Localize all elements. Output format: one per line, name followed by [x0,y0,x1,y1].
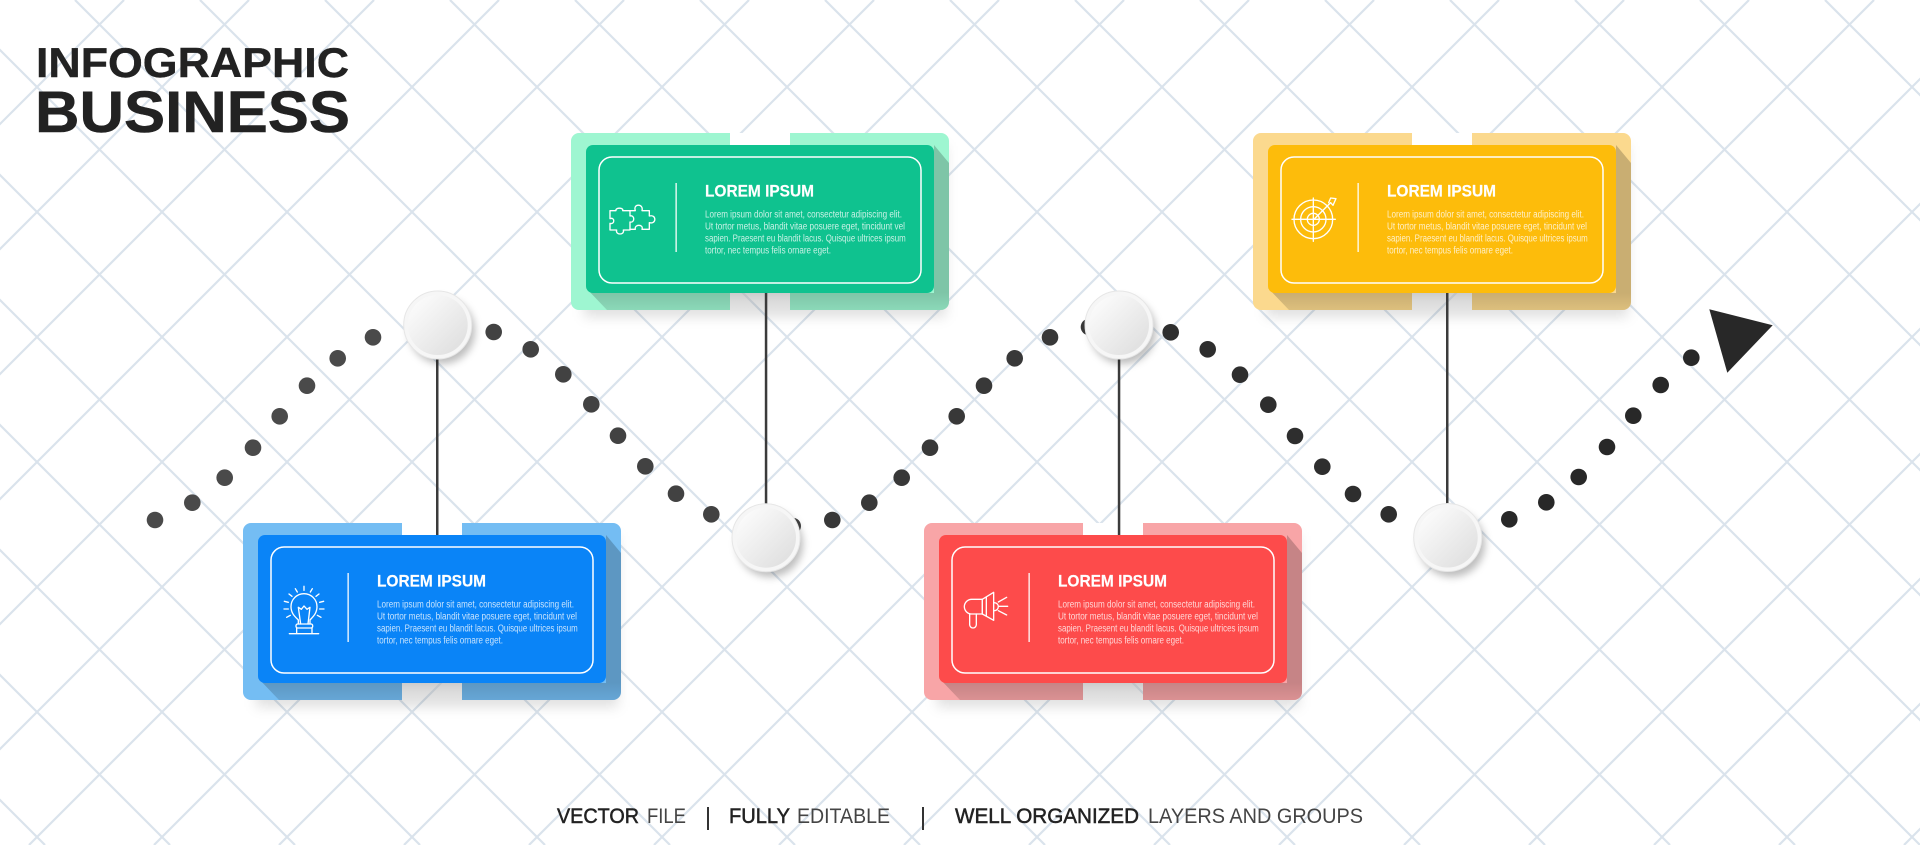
body text: Lorem ipsum dolor sit amet, consectetur adipiscing elit. [1058,599,1255,610]
footer tagline: LAYERS AND GROUPS [1148,805,1363,828]
node: red [1085,291,1156,364]
panel: green card [571,133,949,317]
body text: tortor, nec tempus felis ornare eget. [1387,245,1513,256]
heading: LOREM IPSUM [377,572,486,591]
title line: business: BUSINESS [35,80,350,145]
heading: LOREM IPSUM [1387,182,1496,201]
node: blue [404,291,475,364]
dots: final rise [1501,349,1700,528]
panel: yellow card [1253,133,1631,317]
body text [1387,209,1588,256]
dots: first fall [485,324,801,534]
body text: Ut tortor metus, blandit vitae posuere eget, tincidunt vel [1387,221,1587,232]
icon: megaphone [964,592,1008,628]
body text: sapien. Praesent eu blandit lacus. Quisque ultrices ipsum [377,623,578,634]
panel: blue card [243,523,621,707]
footer tagline: VECTOR [557,805,639,828]
heading: LOREM IPSUM [705,182,814,201]
footer tagline: FILE [647,805,686,828]
arrow head [1709,309,1773,373]
panel: red card [924,523,1302,707]
node: green [732,504,803,577]
body text: sapien. Praesent eu blandit lacus. Quisque ultrices ipsum [705,233,906,244]
footer tagline: WELL ORGANIZED [955,805,1139,828]
body text: Lorem ipsum dolor sit amet, consectetur adipiscing elit. [377,599,574,610]
body text: tortor, nec tempus felis ornare eget. [1058,635,1184,646]
connector: yellow [1446,293,1448,505]
dots: first rise [147,329,381,528]
body text: Lorem ipsum dolor sit amet, consectetur adipiscing elit. [1387,209,1584,220]
dots: second rise [824,319,1097,528]
body text: sapien. Praesent eu blandit lacus. Quisque ultrices ipsum [1058,623,1259,634]
dots: second fall [1162,324,1397,523]
body text: tortor, nec tempus felis ornare eget. [377,635,503,646]
title [35,39,350,145]
footer tagline: EDITABLE [797,805,890,828]
body text: Ut tortor metus, blandit vitae posuere eget, tincidunt vel [377,611,577,622]
icon: light bulb [284,586,324,634]
connector: blue [436,355,438,535]
heading: LOREM IPSUM [1058,572,1167,591]
title line: infographic: INFOGRAPHIC [36,39,349,86]
body text: Ut tortor metus, blandit vitae posuere eget, tincidunt vel [705,221,905,232]
connector: green [765,293,767,505]
body text: tortor, nec tempus felis ornare eget. [705,245,831,256]
icon: puzzle [610,205,655,234]
dotted path [147,319,1700,534]
body text [377,599,578,646]
body text [1058,599,1259,646]
body text [705,209,906,256]
footer tagline [557,805,1363,830]
footer tagline: FULLY [729,805,790,828]
body text: Ut tortor metus, blandit vitae posuere eget, tincidunt vel [1058,611,1258,622]
body text: Lorem ipsum dolor sit amet, consectetur adipiscing elit. [705,209,902,220]
node: yellow [1414,504,1485,577]
connector: red [1118,355,1120,535]
body text: sapien. Praesent eu blandit lacus. Quisque ultrices ipsum [1387,233,1588,244]
icon: target [1292,198,1336,241]
